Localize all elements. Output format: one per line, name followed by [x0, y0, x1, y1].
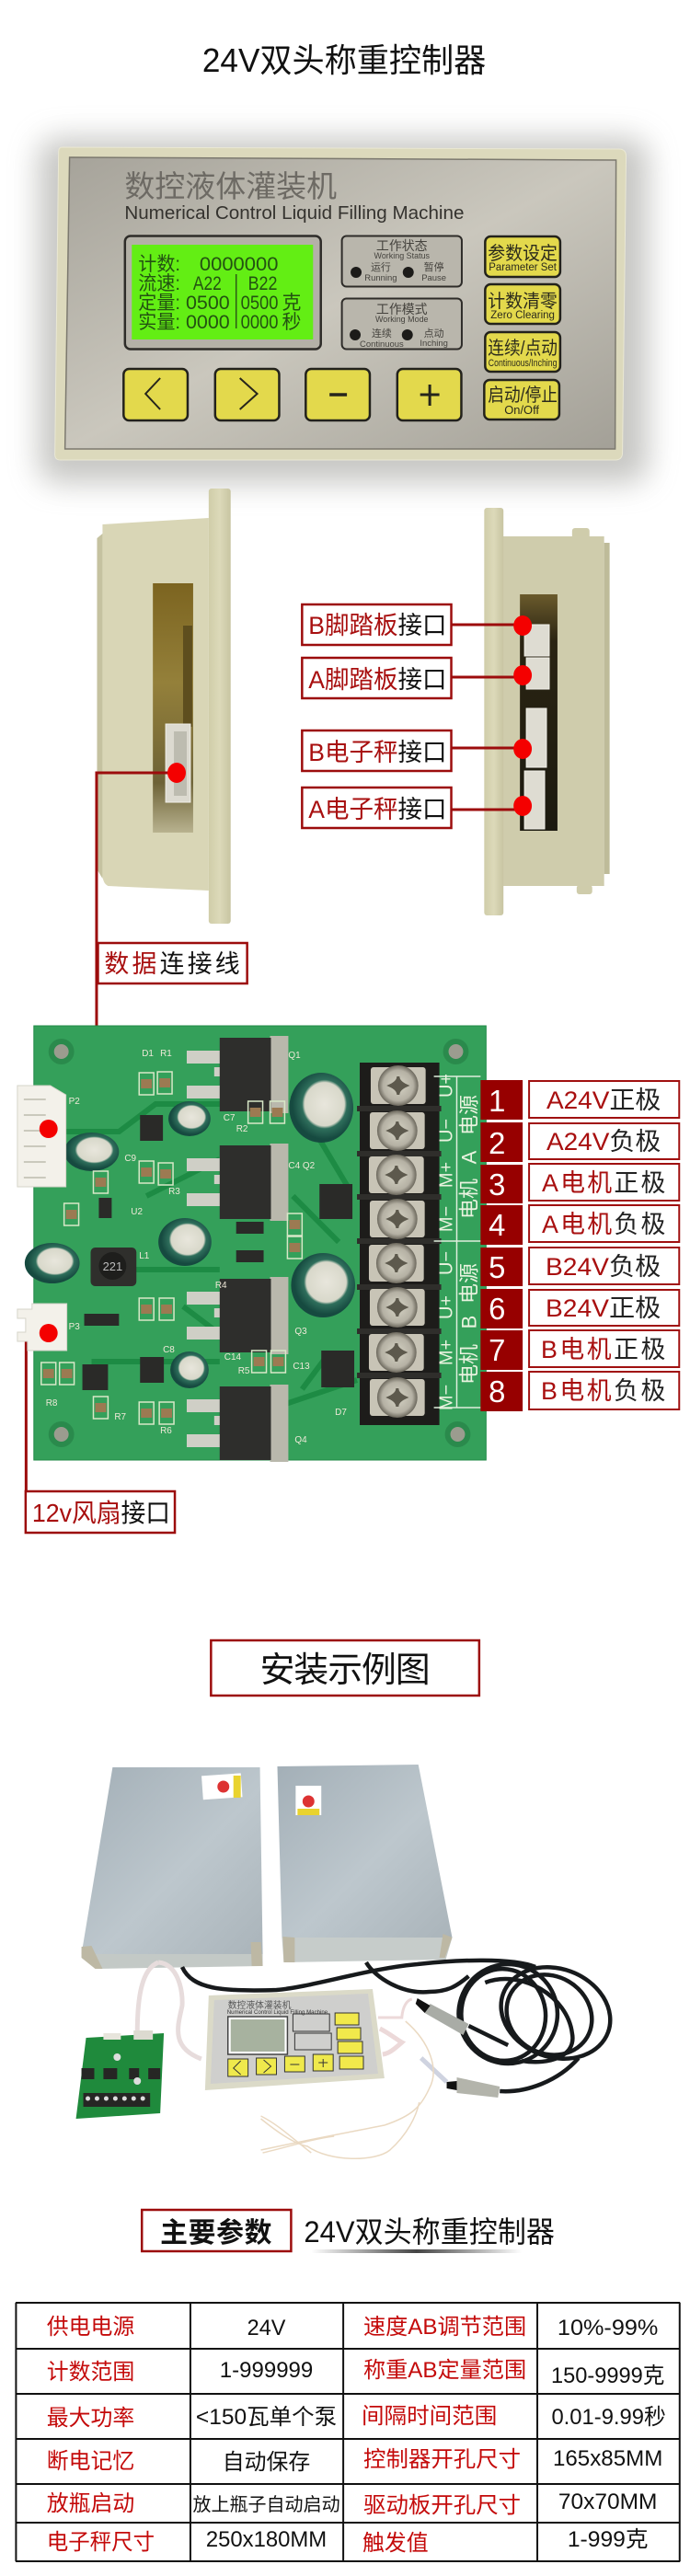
- heading: installation example: 安装示例图: [260, 1651, 431, 1690]
- button: on off: [484, 380, 559, 420]
- title: 24V双头称重控制器: [202, 42, 486, 79]
- terminal function labels: A电机正极: [542, 1169, 665, 1197]
- button: plus: [397, 369, 461, 420]
- table values column 2: 放上瓶子自动启动: [192, 2494, 340, 2515]
- table values column 2: 250x180MM: [206, 2527, 327, 2552]
- working mode box: 工作模式: [376, 302, 428, 316]
- table values column 4: 70x70MM: [558, 2490, 657, 2514]
- terminal function labels: [529, 1081, 679, 1409]
- silkscreen part labels: D1: [142, 1049, 154, 1059]
- LCD display: 0000: [241, 312, 278, 333]
- left side view of controller: [97, 489, 231, 924]
- machine name: 数控液体灌装机: [124, 169, 337, 203]
- button: left arrow: [123, 369, 188, 420]
- LCD display: 克: [282, 293, 301, 314]
- terminal function labels: A24V正极: [546, 1087, 661, 1114]
- table values column 4: 150-9999克: [551, 2363, 664, 2388]
- LCD display: 0000000: [200, 254, 278, 275]
- terminal function labels: A电机负极: [542, 1211, 665, 1238]
- button: continuous inching: [485, 332, 560, 372]
- table values column 4: 0.01-9.99秒: [551, 2405, 666, 2430]
- connector: [166, 724, 190, 802]
- terminal function labels: A24V负极: [546, 1128, 661, 1156]
- table labels column 3: [362, 2315, 526, 2556]
- table values column 4: 10%-99%: [558, 2316, 658, 2340]
- button: continuous inching: Continuous/Inching: [489, 358, 557, 369]
- callout: B scale: [302, 730, 452, 771]
- working mode box: 连续: [372, 327, 392, 339]
- table labels column 1: 供电电源: [47, 2315, 134, 2340]
- terminal number badges: [480, 1080, 523, 1411]
- driver circuit board: [25, 1026, 486, 1462]
- terminal function labels: B电机正极: [541, 1336, 665, 1363]
- cable coil: [453, 1952, 623, 2074]
- table labels column 1: 断电记忆: [47, 2449, 134, 2474]
- callout: B foot pedal: [302, 604, 452, 645]
- button: continuous inching: 连续/点动: [488, 338, 558, 359]
- silkscreen part labels: R8: [46, 1398, 58, 1409]
- silkscreen part labels: P3: [69, 1322, 80, 1332]
- terminal silkscreen labels: M+: [437, 1340, 456, 1365]
- working status box: Pause: [421, 273, 446, 283]
- connectors: [524, 625, 549, 829]
- table values column 4: [551, 2316, 666, 2552]
- inductor: [91, 1248, 136, 1286]
- table values column 2: 1-999999: [220, 2358, 313, 2383]
- silkscreen part labels: U2: [131, 1207, 143, 1217]
- capacitors: [25, 1073, 355, 1388]
- button: on off: 启动/停止: [488, 385, 558, 406]
- LCD display: 定量:: [138, 293, 180, 314]
- working status box: Working Status: [374, 251, 431, 260]
- callout: A foot pedal: A脚踏板接口: [308, 666, 447, 694]
- table labels column 3: 间隔时间范围: [362, 2404, 497, 2429]
- silkscreen part labels: C8: [163, 1345, 175, 1355]
- LCD display: 0500: [241, 293, 278, 314]
- silkscreen part labels: Q1: [288, 1051, 301, 1061]
- terminal number badges: 6: [489, 1292, 505, 1326]
- callout: data cable: 数据连接线: [104, 950, 240, 978]
- red markers: [40, 615, 532, 1342]
- callout: 12v fan: [26, 1491, 175, 1533]
- right side view of controller: [484, 508, 610, 915]
- button: zero clearing: 计数清零: [488, 291, 558, 312]
- callout: A scale: A电子秤接口: [308, 796, 447, 823]
- terminal block with screws: [357, 1063, 442, 1425]
- working mode box: 点动: [424, 328, 444, 339]
- silkscreen part labels: C9: [124, 1154, 136, 1164]
- terminal number badges: 1: [489, 1084, 505, 1118]
- controller front panel: [39, 138, 648, 483]
- table values column 4: 165x85MM: [553, 2446, 662, 2471]
- LCD display: 实量:: [138, 312, 180, 333]
- terminal silkscreen labels: 电机: [457, 1179, 480, 1219]
- button: parameter set: Parameter Set: [489, 260, 558, 273]
- heading: main parameters: [142, 2210, 555, 2253]
- terminal function labels: B电机负极: [541, 1377, 665, 1405]
- terminal number badges: 8: [489, 1374, 505, 1409]
- callout: B scale: B电子秤接口: [308, 739, 447, 766]
- terminal silkscreen labels: U+: [437, 1295, 456, 1319]
- thin sensor wires: [261, 2021, 433, 2158]
- fan and data connectors on board: [17, 1086, 67, 1351]
- heading: main parameters: 主要参数: [160, 2218, 272, 2248]
- heading: main parameters: 24V双头称重控制器: [304, 2215, 555, 2248]
- controller mini photo: 数控液体灌装机: [228, 1999, 291, 2011]
- circuit board mini photo: [76, 2030, 164, 2119]
- working mode box: Working Mode: [375, 315, 429, 324]
- silkscreen part labels: C13: [293, 1362, 310, 1372]
- terminal number badges: 4: [489, 1208, 505, 1242]
- terminal silkscreen labels: M+: [437, 1162, 456, 1188]
- mounting holes: [52, 1041, 467, 1444]
- callout: B foot pedal: B脚踏板接口: [308, 612, 447, 639]
- callout: A scale: [302, 788, 452, 828]
- LCD display: A22: [193, 273, 222, 294]
- silkscreen part labels: Q4: [294, 1435, 307, 1445]
- button: minus: [305, 369, 370, 420]
- silkscreen part labels: [46, 1049, 347, 1445]
- LCD display: [125, 236, 321, 350]
- working mode box: Continuous: [360, 339, 404, 350]
- terminal silkscreen labels: 电机: [457, 1344, 480, 1385]
- button: on off: On/Off: [504, 403, 539, 417]
- terminal silkscreen labels: 电源: [457, 1095, 480, 1135]
- working status box: [342, 236, 462, 287]
- table labels column 3: 称重AB定量范围: [363, 2358, 526, 2383]
- LCD display: 流速:: [138, 273, 180, 294]
- heading: installation example: [211, 1640, 479, 1696]
- button: parameter set: 参数设定: [488, 243, 558, 264]
- terminal number badges: 2: [489, 1126, 505, 1160]
- table labels column 3: 驱动板开孔尺寸: [363, 2493, 521, 2518]
- table values column 2: 24V: [247, 2316, 285, 2340]
- silkscreen part labels: Q3: [294, 1327, 307, 1337]
- working status box: 暂停: [424, 260, 444, 273]
- load cell platform left: [82, 1767, 263, 1969]
- silkscreen part labels: D7: [335, 1408, 347, 1418]
- silkscreen part labels: L1: [139, 1251, 150, 1261]
- working status box: 运行: [371, 261, 391, 273]
- LCD display: 0000: [186, 312, 230, 333]
- LCD display: 秒: [282, 312, 301, 333]
- english machine name: Numerical Control Liquid Filling Machine: [124, 203, 464, 224]
- terminal silkscreen labels: U−: [437, 1119, 456, 1143]
- working status box: Running: [364, 273, 397, 283]
- black cables: [182, 1952, 623, 2091]
- table labels column 3: 触发值: [362, 2531, 429, 2556]
- table labels column 3: 速度AB调节范围: [363, 2315, 526, 2340]
- diodes and ICs: [83, 1115, 354, 1390]
- button: parameter set: [485, 236, 560, 277]
- table labels column 3: 控制器开孔尺寸: [363, 2447, 521, 2472]
- table values column 2: <150瓦单个泵: [196, 2405, 337, 2430]
- callout: A foot pedal: [302, 658, 452, 698]
- silkscreen part labels: C4 Q2: [288, 1161, 316, 1171]
- silkscreen part labels: C7: [224, 1113, 236, 1123]
- controller mini photo: Numerical Control Liquid Filling Machine: [227, 2010, 328, 2016]
- silkscreen part labels: R6: [160, 1426, 172, 1436]
- terminal silkscreen labels: U+: [437, 1074, 456, 1098]
- table labels column 1: 最大功率: [47, 2406, 134, 2431]
- table labels column 1: [47, 2315, 155, 2555]
- callout: 12v fan: 12v风扇接口: [32, 1499, 170, 1527]
- terminal silkscreen labels: 电源: [457, 1263, 480, 1304]
- MOSFET transistors: [187, 1036, 288, 1462]
- silkscreen part labels: R2: [236, 1124, 248, 1134]
- terminal silkscreen labels: U−: [437, 1251, 456, 1275]
- working status box: 工作状态: [376, 238, 428, 253]
- working mode box: Inching: [420, 339, 448, 349]
- terminal silkscreen labels: B: [457, 1316, 480, 1328]
- silkscreen part labels: P2: [69, 1097, 80, 1107]
- terminal silkscreen labels: [434, 1074, 480, 1410]
- installation photo: [76, 1765, 623, 2158]
- silkscreen part labels: R4: [215, 1281, 227, 1291]
- terminal function labels: B24V负极: [546, 1253, 661, 1281]
- button: zero clearing: [485, 284, 560, 324]
- LCD display: 0500: [186, 293, 230, 314]
- inductor: 221: [103, 1259, 122, 1273]
- controller mini photo: [205, 1989, 385, 2090]
- silkscreen part labels: R3: [168, 1187, 180, 1197]
- table labels column 1: 电子秤尺寸: [47, 2530, 155, 2555]
- button: right arrow: [215, 369, 279, 420]
- silkscreen part labels: R7: [114, 1412, 127, 1422]
- parameter table: [16, 2303, 680, 2561]
- load cell platform right: [277, 1765, 453, 1962]
- LCD display: B22: [248, 273, 277, 294]
- aviation connectors: [416, 1998, 500, 2098]
- working mode box: [342, 298, 462, 350]
- terminal number badges: 3: [489, 1167, 505, 1202]
- silkscreen part labels: C14: [224, 1352, 241, 1363]
- terminal silkscreen labels: M−: [437, 1206, 456, 1232]
- terminal function labels: B24V正极: [546, 1294, 661, 1322]
- terminal number badges: 5: [489, 1250, 505, 1284]
- terminal number badges: 7: [489, 1333, 505, 1367]
- connector callout lines: [26, 625, 520, 1491]
- silkscreen part labels: R5: [238, 1366, 250, 1376]
- table values column 2: [192, 2316, 340, 2552]
- table values column 2: 自动保存: [223, 2450, 310, 2475]
- silkscreen part labels: R1: [160, 1049, 172, 1059]
- small components: [41, 1072, 302, 1424]
- button: zero clearing: Zero Clearing: [490, 308, 555, 321]
- LCD display: 计数:: [138, 254, 180, 275]
- terminal silkscreen labels: A: [457, 1150, 480, 1164]
- table labels column 1: 放瓶启动: [47, 2491, 134, 2516]
- callout: data cable: [98, 943, 247, 983]
- table labels column 1: 计数范围: [47, 2360, 134, 2385]
- terminal silkscreen labels: M−: [437, 1385, 456, 1410]
- ribbon cables: [137, 1962, 447, 2082]
- table values column 4: 1-999克: [568, 2527, 648, 2552]
